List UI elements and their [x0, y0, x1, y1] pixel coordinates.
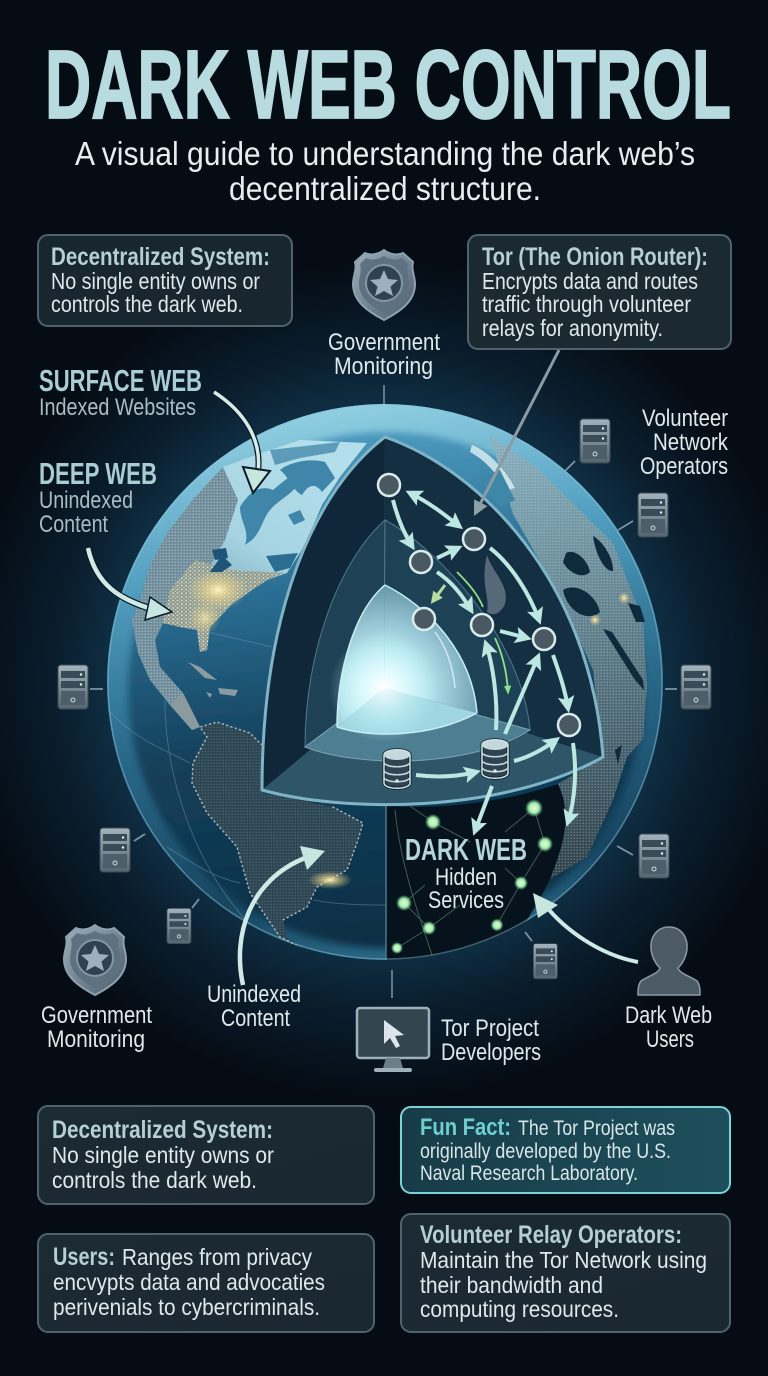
- panel: tor: Tor (The Onion Router):: [482, 243, 708, 271]
- great lakes: [210, 548, 232, 572]
- inner core: [337, 585, 385, 727]
- globe rim: [108, 405, 662, 959]
- tor pointer arrow: [476, 350, 559, 512]
- icon: database 2: [482, 740, 508, 778]
- icon: database 1: [384, 750, 410, 788]
- grid lines: [108, 632, 386, 925]
- label: volunteer network operators: Volunteer: [642, 405, 728, 432]
- label: unindexed content: Unindexed: [207, 981, 301, 1008]
- label: dark web hidden services: Hidden: [435, 864, 497, 891]
- label: dark web users: Dark Web: [625, 1002, 712, 1029]
- land: caribbean islands: [188, 662, 238, 698]
- panel: decentralized system (bottom): controls the dark web.: [52, 1167, 257, 1193]
- arrow: unindexed content: [240, 846, 325, 985]
- label: unindexed content: Content: [221, 1005, 290, 1032]
- middle shell: [305, 520, 385, 747]
- globe atmosphere: [107, 404, 663, 960]
- icon: user silhouette: [638, 927, 700, 995]
- panel: users: encvypts data and advocaties: [53, 1269, 325, 1295]
- west dotted zone: [132, 467, 238, 730]
- panel: fun fact: [401, 1107, 730, 1193]
- panel: decentralized system (bottom): Decentralized System:: [52, 1116, 273, 1144]
- label: dark web hidden services: DARK WEB: [405, 832, 527, 867]
- label: government monitoring (bottom): Monitoring: [47, 1026, 145, 1053]
- label: volunteer network operators: Network: [653, 429, 729, 456]
- icon: government shield (bottom): [64, 925, 126, 995]
- icon: server 4: [639, 834, 669, 878]
- network arrows: [393, 493, 575, 831]
- panel: decentralized system (bottom): No single entity owns or: [52, 1142, 274, 1168]
- land: central america: [170, 693, 200, 730]
- panel: tor: traffic through volunteer: [482, 291, 691, 317]
- icon: server 5: [533, 944, 557, 979]
- panel: fun fact: Fun Fact:: [420, 1114, 511, 1141]
- panel: volunteer relay operators: Volunteer Relay Operators:: [420, 1221, 682, 1249]
- panel: tor: Encrypts data and routes: [482, 268, 698, 294]
- icon: server 7: [100, 828, 130, 872]
- label: government monitoring (top): Government: [328, 329, 440, 356]
- label: dark web hidden services: Services: [428, 887, 504, 914]
- panel: tor: [468, 235, 731, 349]
- panel: fun fact: The Tor Project was: [518, 1117, 675, 1140]
- seas and lakes: [563, 536, 613, 616]
- east usa lights: [163, 560, 285, 652]
- thin flow arrows: [457, 572, 483, 607]
- label: tor project developers: Developers: [441, 1039, 541, 1066]
- panel: volunteer relay operators: their bandwidth and: [420, 1272, 603, 1298]
- label: tor project developers: [441, 1015, 541, 1066]
- background glow: [0, 230, 768, 1110]
- subtitle: A visual guide to understanding the dark web’s: [75, 135, 695, 172]
- arrow: surface web: [214, 392, 270, 493]
- icon: server 6: [167, 908, 191, 944]
- icon: server 8: [58, 665, 88, 709]
- label: volunteer network operators: [640, 405, 729, 480]
- label: unindexed content: [207, 981, 301, 1032]
- label: surface web: SURFACE WEB: [39, 363, 202, 398]
- panel: decentralized system (top): controls the dark web.: [51, 291, 243, 317]
- subtitle: [75, 135, 695, 207]
- arrow: dark web users: [533, 893, 638, 962]
- ocean: [128, 432, 644, 948]
- panel: decentralized system (bottom): [38, 1106, 374, 1204]
- panel: decentralized system (top): No single entity owns or: [51, 268, 260, 294]
- outer shell: [262, 437, 385, 790]
- panel: volunteer relay operators: Maintain the Tor Network using: [420, 1247, 707, 1273]
- label: government monitoring (top): [328, 329, 440, 380]
- land: eastern hemisphere: [470, 436, 647, 879]
- panel: users: Ranges from privacy: [122, 1244, 312, 1270]
- panel: users: [38, 1234, 374, 1332]
- label: deep web: Unindexed: [39, 487, 133, 514]
- icon: government shield (top): [353, 250, 415, 320]
- label: government monitoring (top): Monitoring: [334, 353, 433, 380]
- label: tor project developers: Tor Project: [441, 1015, 539, 1042]
- panel: decentralized system (top): [38, 235, 292, 326]
- panel: decentralized system (top): Decentralized System:: [51, 243, 270, 271]
- icon: server 2: [638, 493, 668, 537]
- dark web region: [386, 784, 566, 965]
- label: surface web: Indexed Websites: [39, 394, 196, 421]
- icon: server 1: [580, 419, 610, 463]
- panel: volunteer relay operators: computing resources.: [420, 1296, 619, 1322]
- label: government monitoring (bottom): [41, 1002, 152, 1053]
- panel: volunteer relay operators: [401, 1214, 730, 1332]
- label: dark web hidden services: [405, 832, 527, 914]
- arrow: deep web: [88, 548, 172, 620]
- smoke wisp: [484, 555, 506, 614]
- cutaway wedge: [262, 437, 603, 805]
- icon: monitor with cursor: [357, 1008, 429, 1072]
- panel: tor: relays for anonymity.: [482, 315, 663, 341]
- panel: fun fact: originally developed by the U.S.: [420, 1140, 671, 1163]
- top streaks: [470, 445, 515, 490]
- panel: users: perivenials to cybercriminals.: [53, 1294, 320, 1320]
- panel: fun fact: Naval Research Laboratory.: [420, 1162, 638, 1185]
- hudson bay and canadian water: [240, 478, 294, 545]
- subtitle: decentralized structure.: [229, 170, 541, 207]
- panel: users: Users:: [53, 1243, 115, 1271]
- land: south america: [192, 722, 363, 947]
- label: government monitoring (bottom): Government: [41, 1002, 152, 1029]
- label: surface web: [39, 363, 202, 421]
- wedge rim: [262, 437, 603, 805]
- label: dark web users: Users: [646, 1026, 694, 1053]
- green nodes: [391, 799, 553, 954]
- label: volunteer network operators: Operators: [640, 453, 728, 480]
- icon: server 3: [681, 665, 711, 709]
- land: north america: [132, 440, 367, 730]
- globe: [105, 350, 665, 965]
- relay nodes: [378, 474, 580, 736]
- label: deep web: [39, 456, 157, 538]
- label: deep web: Content: [39, 511, 108, 538]
- label: deep web: DEEP WEB: [39, 456, 157, 491]
- label: dark web users: [625, 1002, 712, 1053]
